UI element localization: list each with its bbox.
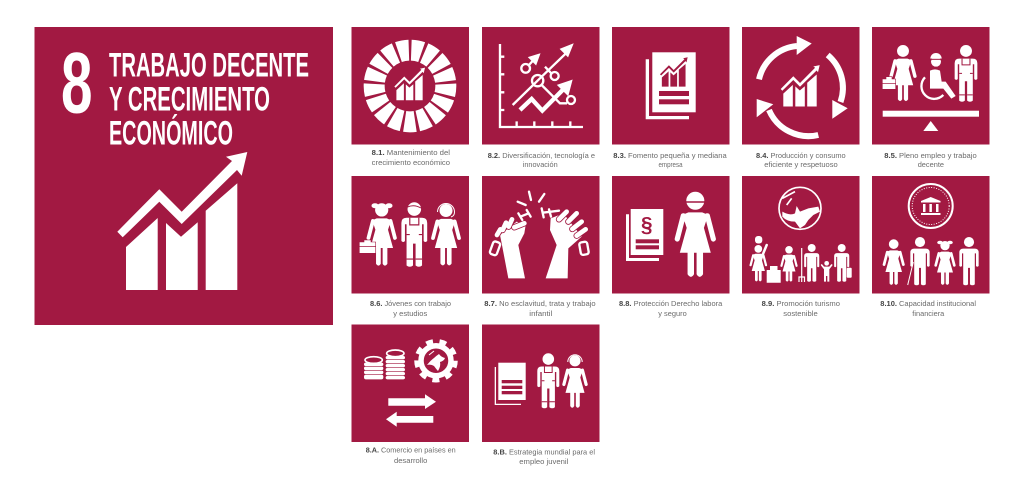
caption 8.2 [488,151,595,169]
caption 8.3 [613,151,728,169]
caption 8.8: 8.8. Protección Derecho labora [619,299,723,308]
caption 8.6 [370,299,451,318]
panel: 8.A [352,324,469,465]
caption 8.2: 8.2. Diversificación, tecnología e [488,151,595,160]
icon: balance bar and fulcrum [883,111,979,131]
icon: worker in wheelchair [921,53,956,99]
caption 8.2: innovación [523,160,558,169]
caption 8.B [493,447,595,466]
icon: diversification chart [500,44,583,127]
icon: SDG wheel with chart [374,50,446,122]
icon: tourists and locals group [751,236,852,283]
panel: 8.6 [352,176,469,318]
caption 8.6: y estudios [393,309,428,318]
icon: man in overalls [955,45,977,102]
caption 8.A: 8.A. Comercio en países en [366,446,456,455]
caption 8.7: 8.7. No esclavitud, trata y trabajo [484,299,596,308]
caption 8.9: sostenible [783,309,818,318]
caption 8.6: 8.6. Jóvenes con trabajo [370,299,451,308]
icon: girl with headset [433,204,459,265]
panel: 8.4 [742,27,860,169]
goal number 8: 8 [61,36,92,132]
caption 8.4: 8.4. Producción y consumo [756,151,846,160]
panel: 8.3 [612,27,730,169]
icon: fists breaking chains [489,192,589,278]
caption 8.A: desarrollo [394,456,427,465]
caption 8.9 [762,299,840,318]
caption 8.1 [372,148,450,167]
icon: gear with globe [416,341,456,380]
icon: growth bar chart with arrow [117,152,247,290]
title: trabajo decente y crecimiento económico: Y CRECIMIENTO [109,81,270,119]
icon: exchange arrows [386,394,436,427]
panel: 8.1 [352,27,469,167]
panel: goal 8 main tile [34,27,333,325]
caption 8.4: eficiente y respetuoso [764,160,838,169]
panel: 8.B [482,324,600,466]
caption 8.5 [884,151,977,169]
title: trabajo decente y crecimiento económico [109,47,309,152]
caption 8.3: 8.3. Fomento pequeña y mediana [613,151,728,160]
caption 8.1: 8.1. Mantenimiento del [372,148,450,157]
icon: legal document: § [641,214,653,236]
caption 8.5: 8.5. Pleno empleo y trabajo [884,151,977,160]
panel: 8.7 [482,176,600,318]
icon: coin stacks [364,350,405,379]
icon: family group [884,237,979,285]
caption 8.B: 8.B. Estrategia mundial para el [493,447,595,456]
caption 8.9: 8.9. Promoción turismo [762,299,840,308]
caption 8.8 [619,299,723,318]
panel: 8.8 [612,176,730,318]
caption 8.B: empleo juvenil [519,457,569,466]
icon: institution medallion [909,184,953,228]
caption 8.7 [484,299,596,318]
icon: woman with helmet [677,192,713,277]
icon: legal document [626,209,663,261]
panel: 8.9 [742,176,860,318]
panel: 8.2 [482,27,600,169]
icon: circular arrows with chart [757,36,848,136]
icon: girl with headset [564,355,586,408]
caption 8.10: 8.10. Capacidad institucional [880,299,976,308]
title: trabajo decente y crecimiento económico: TRABAJO DECENTE [109,47,309,85]
caption 8.3: empresa [658,160,683,169]
icon: girl with briefcase [359,203,395,266]
caption 8.10: financiera [912,309,945,318]
icon: woman with briefcase [882,45,915,101]
caption 8.5: decente [918,160,944,169]
icon: document with chart [646,52,696,119]
icon: strategy document [495,363,526,405]
caption 8.10 [880,299,976,318]
icon: globe [779,187,821,229]
panel: 8.10 [872,176,990,318]
panel: 8.5 [872,27,990,169]
caption 8.1: crecimiento económico [372,158,450,167]
caption 8.8: y seguro [658,309,687,318]
caption 8.7: infantil [529,309,553,318]
icon: boy in overalls [537,353,559,408]
title: trabajo decente y crecimiento económico: ECONÓMICO [109,114,233,152]
icon: boy in overalls [401,202,427,267]
caption 8.A [366,446,456,465]
caption 8.4 [756,151,846,169]
